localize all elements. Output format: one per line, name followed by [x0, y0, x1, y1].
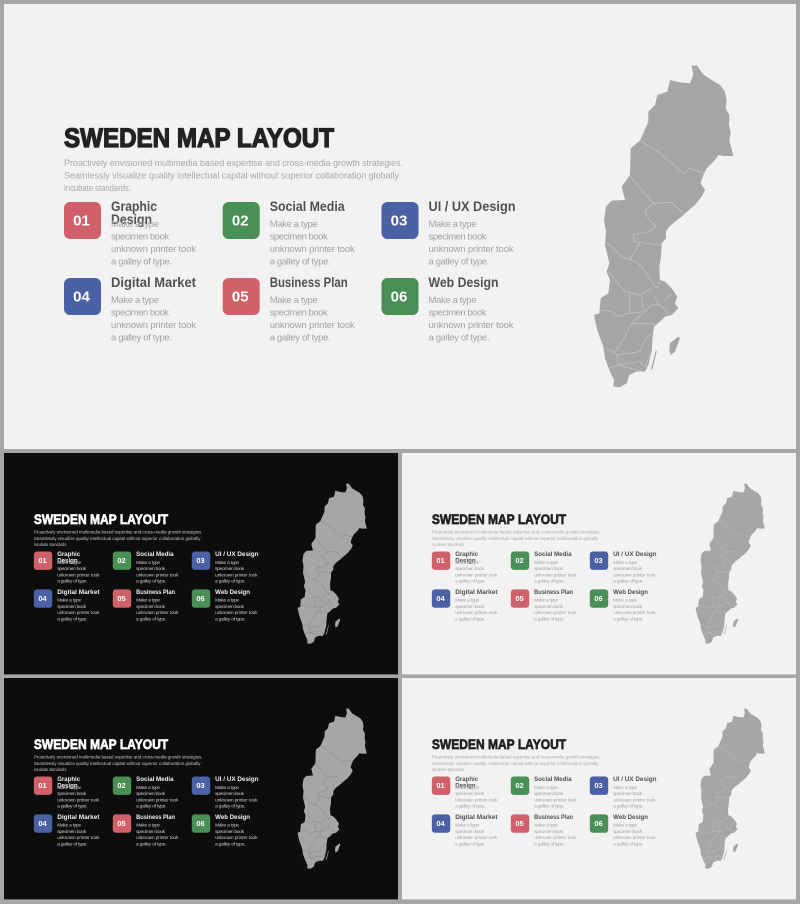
item 01: 01 — [38, 781, 47, 790]
intro text: Proactively envisioned multimedia based expertise and cross-media growth strategies. — [34, 755, 203, 760]
intro text — [64, 158, 403, 193]
item 06: specimen book — [613, 604, 643, 610]
item 05: 05 — [515, 594, 524, 603]
item 06 — [192, 814, 258, 847]
item 06: unknown printer took — [215, 610, 258, 616]
item 03: UI / UX Design — [613, 776, 656, 783]
item 04: Digital Market — [57, 814, 100, 821]
item 05: unknown printer took — [534, 610, 577, 616]
item 06 — [192, 589, 258, 622]
item 01: Design — [455, 782, 476, 789]
item 04: Digital Market — [111, 275, 196, 290]
item 02: 02 — [232, 212, 249, 230]
panel: dark slide bottom left — [4, 678, 398, 899]
item 04: 04 — [436, 594, 446, 603]
item 05: Business Plan — [534, 814, 573, 821]
item 05: Business Plan — [270, 275, 348, 290]
item 04: specimen book — [57, 829, 87, 835]
item 01: Graphic — [455, 551, 478, 558]
item 05: a galley of type. — [136, 616, 167, 622]
item 03: 03 — [594, 556, 603, 565]
item 03 — [192, 776, 258, 810]
item 01: Design — [57, 557, 78, 564]
item 01: unknown printer took — [455, 797, 498, 803]
item 03: 03 — [594, 781, 603, 790]
item 03: Make a type — [613, 785, 637, 791]
item 05: Business Plan — [136, 589, 175, 596]
item 05: 05 — [117, 594, 126, 603]
item 03: 03 — [391, 212, 407, 230]
item 06 — [590, 589, 656, 622]
item 05: a galley of type. — [270, 332, 331, 344]
item 01: unknown printer took — [57, 572, 100, 578]
item 01: 01 — [73, 212, 90, 230]
item 05: Make a type — [136, 598, 160, 604]
item 03: unknown printer took — [428, 244, 514, 255]
item 02: specimen book — [534, 566, 564, 572]
intro text — [432, 755, 601, 772]
item 04: 04 — [38, 594, 48, 603]
item 06: 06 — [196, 819, 205, 828]
item 04 — [432, 589, 498, 622]
item 03: UI / UX Design — [428, 199, 516, 214]
item 03: a galley of type. — [613, 579, 644, 585]
item 06 — [590, 814, 656, 847]
item 05 — [113, 589, 179, 622]
item 06 — [382, 275, 514, 344]
item 03: unknown printer took — [215, 797, 258, 803]
item 02: unknown printer took — [136, 572, 179, 578]
item 02: Social Media — [136, 776, 174, 783]
intro text — [34, 755, 203, 772]
item 01: specimen book — [111, 232, 169, 242]
title: SWEDEN MAP LAYOUT — [432, 512, 567, 527]
item 06: Web Design — [215, 814, 250, 821]
item 06: Web Design — [613, 589, 648, 596]
item 02: Make a type — [270, 219, 318, 230]
item 05: unknown printer took — [136, 610, 179, 616]
item 05: specimen book — [136, 829, 166, 835]
map of Sweden — [298, 709, 367, 869]
item 04: a galley of type. — [57, 616, 88, 622]
item 03: 03 — [196, 556, 205, 565]
intro text: Proactively envisioned multimedia based expertise and cross-media growth strategies. — [432, 755, 601, 760]
item 01: 01 — [436, 781, 445, 790]
item 06: a galley of type. — [215, 841, 246, 847]
item 02: specimen book — [534, 791, 564, 797]
item 03: a galley of type. — [428, 256, 490, 268]
item 03: a galley of type. — [215, 579, 246, 585]
item 02: 02 — [117, 556, 126, 565]
title: SWEDEN MAP LAYOUT — [432, 737, 567, 752]
item 02 — [511, 551, 577, 585]
item 03: specimen book — [613, 566, 643, 572]
item 01: specimen book — [455, 791, 485, 797]
item 04 — [34, 589, 100, 622]
panel: light slide top right — [402, 453, 796, 674]
item 01: specimen book — [57, 566, 87, 572]
item 03: Make a type — [613, 560, 637, 566]
item 01: Graphic — [57, 776, 80, 783]
item 03: specimen book — [613, 791, 643, 797]
item 06: Make a type — [215, 598, 239, 604]
item 03: UI / UX Design — [613, 551, 656, 558]
item 05: specimen book — [534, 829, 564, 835]
item 03: UI / UX Design — [215, 776, 258, 783]
item 02 — [223, 199, 355, 268]
item 06: unknown printer took — [613, 610, 656, 616]
item 01: Graphic — [455, 776, 478, 783]
item 02: unknown printer took — [136, 797, 179, 803]
item 05: Business Plan — [136, 814, 175, 821]
item 02: unknown printer took — [534, 797, 577, 803]
title: SWEDEN MAP LAYOUT — [34, 737, 169, 752]
item 04: a galley of type. — [57, 841, 88, 847]
item 01: Design — [111, 212, 152, 227]
item 01: Make a type — [57, 785, 81, 791]
item 05: specimen book — [136, 604, 166, 610]
intro text: Proactively envisioned multimedia based expertise and cross-media growth strategies. — [64, 158, 403, 168]
item 05: a galley of type. — [534, 841, 565, 847]
item 03: unknown printer took — [215, 572, 258, 578]
item 01 — [34, 551, 100, 585]
item 02: Social Media — [136, 551, 174, 558]
item 02 — [113, 551, 179, 585]
item 04: specimen book — [455, 829, 485, 835]
item 02: a galley of type. — [534, 579, 565, 585]
item 01: specimen book — [455, 566, 485, 572]
item 02: specimen book — [136, 566, 166, 572]
item 06: Make a type — [428, 295, 476, 306]
item 02: a galley of type. — [136, 579, 167, 585]
item 01: 01 — [436, 556, 445, 565]
item 04: unknown printer took — [57, 610, 100, 616]
item 04: specimen book — [57, 604, 87, 610]
item 04: specimen book — [111, 308, 169, 318]
item 02: 02 — [515, 556, 524, 565]
item 06: Make a type — [613, 823, 637, 829]
item 04: a galley of type. — [111, 332, 172, 344]
map of Sweden — [594, 66, 733, 387]
item 06: Web Design — [428, 275, 498, 290]
item 05: unknown printer took — [136, 835, 179, 841]
item 02: Make a type — [136, 785, 160, 791]
item 02 — [113, 776, 179, 810]
item 03: Make a type — [215, 560, 239, 566]
item 06: a galley of type. — [613, 841, 644, 847]
item 02: a galley of type. — [534, 804, 565, 810]
item 04: 04 — [38, 819, 48, 828]
item 01: Design — [455, 557, 476, 564]
item 04: a galley of type. — [455, 841, 486, 847]
item 05: Make a type — [534, 823, 558, 829]
item 02: a galley of type. — [136, 804, 167, 810]
item 01: 01 — [38, 556, 47, 565]
item 06: 06 — [196, 594, 205, 603]
item 06: 06 — [391, 288, 407, 306]
item 01 — [34, 776, 100, 810]
intro text: incubate standards. — [432, 767, 465, 772]
item 05: 05 — [232, 288, 249, 306]
intro text: Seamlessly visualize quality intellectual capital without superior collaboration globally — [34, 536, 201, 541]
item 04 — [64, 275, 196, 344]
item 04: a galley of type. — [455, 616, 486, 622]
item 03 — [590, 776, 656, 810]
item 01 — [432, 551, 498, 585]
item 02: 02 — [117, 781, 126, 790]
item 05: Make a type — [270, 295, 318, 306]
item 06: specimen book — [215, 604, 245, 610]
item 04 — [34, 814, 100, 847]
intro text: incubate standards. — [432, 542, 465, 547]
item 01: unknown printer took — [111, 244, 196, 255]
item 01: unknown printer took — [455, 572, 498, 578]
item 01: a galley of type. — [455, 804, 486, 810]
item 05: unknown printer took — [534, 835, 577, 841]
intro text: Proactively envisioned multimedia based expertise and cross-media growth strategies. — [432, 530, 601, 535]
map of Sweden — [298, 484, 367, 644]
item 03 — [382, 199, 516, 268]
item 06: Web Design — [215, 589, 250, 596]
item 03: unknown printer took — [613, 572, 656, 578]
item 05: 05 — [515, 819, 524, 828]
item 06: unknown printer took — [613, 835, 656, 841]
item 02: specimen book — [270, 232, 328, 242]
item 05 — [511, 814, 577, 847]
item 04 — [432, 814, 498, 847]
item 04: 04 — [73, 288, 90, 306]
item 04: Make a type — [455, 598, 479, 604]
item 02: Make a type — [534, 785, 558, 791]
item 06: Make a type — [613, 598, 637, 604]
item 02: a galley of type. — [270, 256, 331, 268]
item 05: a galley of type. — [534, 616, 565, 622]
item 06: unknown printer took — [428, 320, 514, 331]
item 02: unknown printer took — [270, 244, 355, 255]
item 04: unknown printer took — [455, 610, 498, 616]
intro text — [34, 530, 203, 547]
item 01: specimen book — [57, 791, 87, 797]
item 01 — [64, 199, 196, 268]
item 03: specimen book — [215, 566, 245, 572]
item 01: Make a type — [455, 785, 479, 791]
item 03: 03 — [196, 781, 205, 790]
item 03: UI / UX Design — [215, 551, 258, 558]
intro text: Seamlessly visualize quality intellectual capital without superior collaboration globally — [64, 170, 400, 180]
intro text — [432, 530, 601, 547]
item 05: a galley of type. — [136, 841, 167, 847]
item 05: specimen book — [534, 604, 564, 610]
item 02: Make a type — [136, 560, 160, 566]
item 03 — [590, 551, 656, 585]
item 06: specimen book — [215, 829, 245, 835]
item 01: a galley of type. — [57, 579, 88, 585]
intro text: incubate standards. — [64, 183, 131, 193]
item 01: Make a type — [455, 560, 479, 566]
item 02: specimen book — [136, 791, 166, 797]
item 01: a galley of type. — [111, 256, 172, 268]
item 06: a galley of type. — [428, 332, 490, 344]
intro text: Seamlessly visualize quality intellectual capital without superior collaboration globally — [432, 536, 599, 541]
panel: dark slide top left — [4, 453, 398, 674]
item 05 — [113, 814, 179, 847]
item 06: Make a type — [215, 823, 239, 829]
item 06: specimen book — [613, 829, 643, 835]
item 01: unknown printer took — [57, 797, 100, 803]
item 04: Make a type — [111, 295, 159, 306]
item 01: a galley of type. — [455, 579, 486, 585]
item 05 — [511, 589, 577, 622]
item 03: specimen book — [215, 791, 245, 797]
item 04: Make a type — [455, 823, 479, 829]
item 04: Digital Market — [455, 589, 498, 596]
intro text: incubate standards. — [34, 767, 67, 772]
item 04: specimen book — [455, 604, 485, 610]
item 06: specimen book — [428, 308, 487, 318]
item 06: a galley of type. — [613, 616, 644, 622]
item 03: specimen book — [428, 232, 487, 242]
item 04: Digital Market — [57, 589, 100, 596]
intro text: Seamlessly visualize quality intellectual capital without superior collaboration globally — [34, 761, 201, 766]
item 05: Make a type — [136, 823, 160, 829]
item 06: unknown printer took — [215, 835, 258, 841]
map of Sweden — [696, 484, 765, 644]
item 04: unknown printer took — [455, 835, 498, 841]
item 03: Make a type — [428, 219, 476, 230]
item 06: Web Design — [613, 814, 648, 821]
item 01: Graphic — [111, 199, 157, 214]
panel: large light slide — [4, 4, 796, 449]
item 05 — [223, 275, 355, 344]
panel: light slide bottom right — [402, 678, 796, 899]
item 02: 02 — [515, 781, 524, 790]
item 03 — [192, 551, 258, 585]
item 05: 05 — [117, 819, 126, 828]
map of Sweden — [696, 709, 765, 869]
item 01: Graphic — [57, 551, 80, 558]
item 01: Make a type — [57, 560, 81, 566]
item 01: Make a type — [111, 219, 159, 230]
item 05: specimen book — [270, 308, 328, 318]
item 04: Digital Market — [455, 814, 498, 821]
item 02: Make a type — [534, 560, 558, 566]
item 02: unknown printer took — [534, 572, 577, 578]
item 06: 06 — [594, 594, 603, 603]
item 03: Make a type — [215, 785, 239, 791]
item 05: Make a type — [534, 598, 558, 604]
intro text: incubate standards. — [34, 542, 67, 547]
item 05: Business Plan — [534, 589, 573, 596]
item 03: a galley of type. — [613, 804, 644, 810]
intro text: Seamlessly visualize quality intellectual capital without superior collaboration globally — [432, 761, 599, 766]
item 01: a galley of type. — [57, 804, 88, 810]
item 02: Social Media — [270, 199, 345, 214]
item 06: 06 — [594, 819, 603, 828]
item 03: a galley of type. — [215, 804, 246, 810]
item 04: Make a type — [57, 823, 81, 829]
title: SWEDEN MAP LAYOUT — [34, 512, 169, 527]
item 04: Make a type — [57, 598, 81, 604]
title: SWEDEN MAP LAYOUT — [64, 123, 334, 153]
item 06: a galley of type. — [215, 616, 246, 622]
item 01: Design — [57, 782, 78, 789]
item 02 — [511, 776, 577, 810]
item 01 — [432, 776, 498, 810]
item 02: Social Media — [534, 776, 572, 783]
item 04: unknown printer took — [111, 320, 196, 331]
item 04: 04 — [436, 819, 446, 828]
item 03: unknown printer took — [613, 797, 656, 803]
item 05: unknown printer took — [270, 320, 355, 331]
item 04: unknown printer took — [57, 835, 100, 841]
item 02: Social Media — [534, 551, 572, 558]
intro text: Proactively envisioned multimedia based expertise and cross-media growth strategies. — [34, 530, 203, 535]
